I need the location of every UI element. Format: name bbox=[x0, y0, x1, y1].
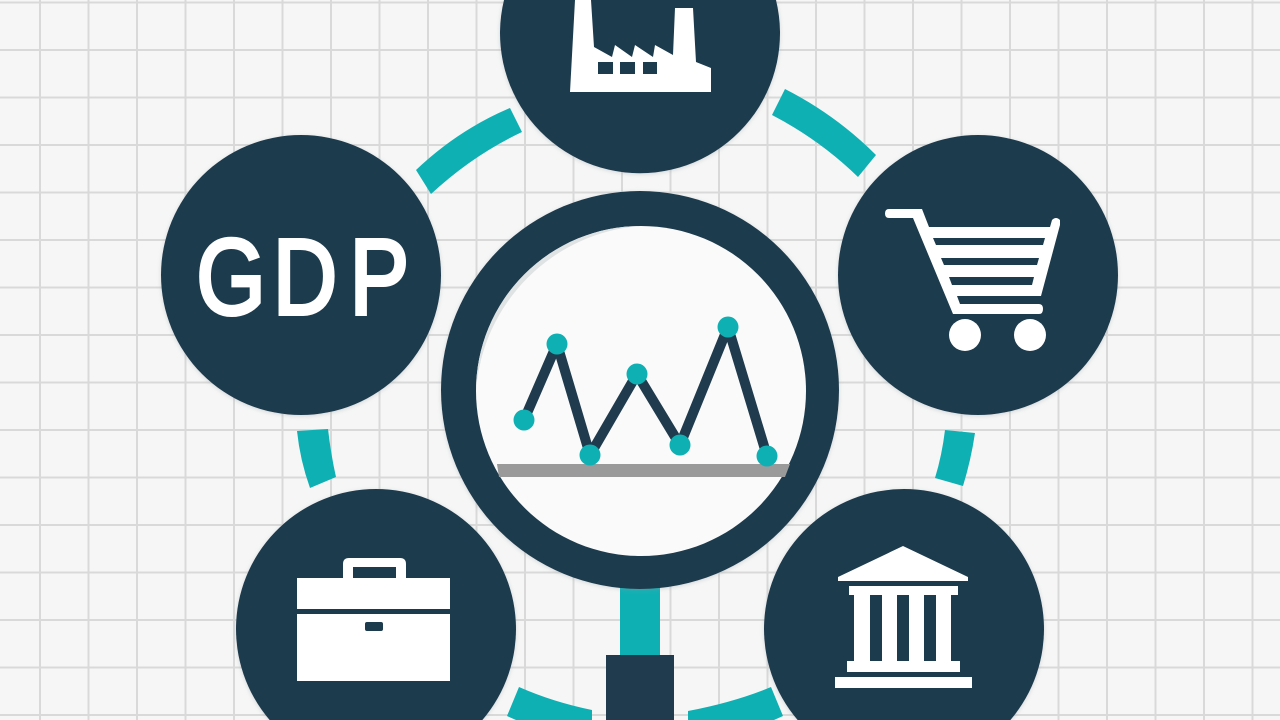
factory background bbox=[500, 0, 780, 173]
arc: right bbox=[935, 430, 975, 486]
icon: briefcase bbox=[297, 558, 450, 681]
arc: top left bbox=[416, 108, 522, 194]
arc: bottom right bbox=[688, 687, 783, 720]
arc: bottom left bbox=[507, 687, 592, 720]
chart: baseline bbox=[497, 464, 790, 477]
circle: GDP bbox=[161, 135, 441, 415]
circle: factory bbox=[500, 0, 780, 173]
briefcase background bbox=[236, 489, 516, 720]
chart points bbox=[514, 316, 778, 466]
lens glass bbox=[476, 226, 806, 556]
circle: bank bbox=[764, 489, 1044, 720]
circle: shopping cart bbox=[838, 135, 1118, 415]
lens ring bbox=[441, 191, 839, 589]
handle grip bbox=[606, 655, 674, 720]
handle neck bbox=[620, 580, 660, 656]
arc: left bbox=[297, 429, 336, 488]
line chart bbox=[514, 316, 778, 466]
bank background bbox=[764, 489, 1044, 720]
cart basket bbox=[885, 209, 1060, 314]
magnifier handle bbox=[606, 580, 674, 720]
GDP label: GDP bbox=[196, 216, 409, 337]
chart line bbox=[524, 327, 767, 456]
icon: factory bbox=[570, 0, 711, 92]
GDP background bbox=[161, 135, 441, 415]
arc: top right bbox=[772, 89, 876, 177]
teal ring segments connecting the circles bbox=[297, 89, 975, 720]
cart wheels bbox=[949, 319, 1046, 351]
magnifier lens bbox=[441, 191, 839, 589]
lens inner shading bbox=[476, 226, 641, 391]
icon: shopping cart bbox=[885, 209, 1060, 351]
circle: briefcase bbox=[236, 489, 516, 720]
icon: bank bbox=[835, 546, 972, 688]
cart background bbox=[838, 135, 1118, 415]
